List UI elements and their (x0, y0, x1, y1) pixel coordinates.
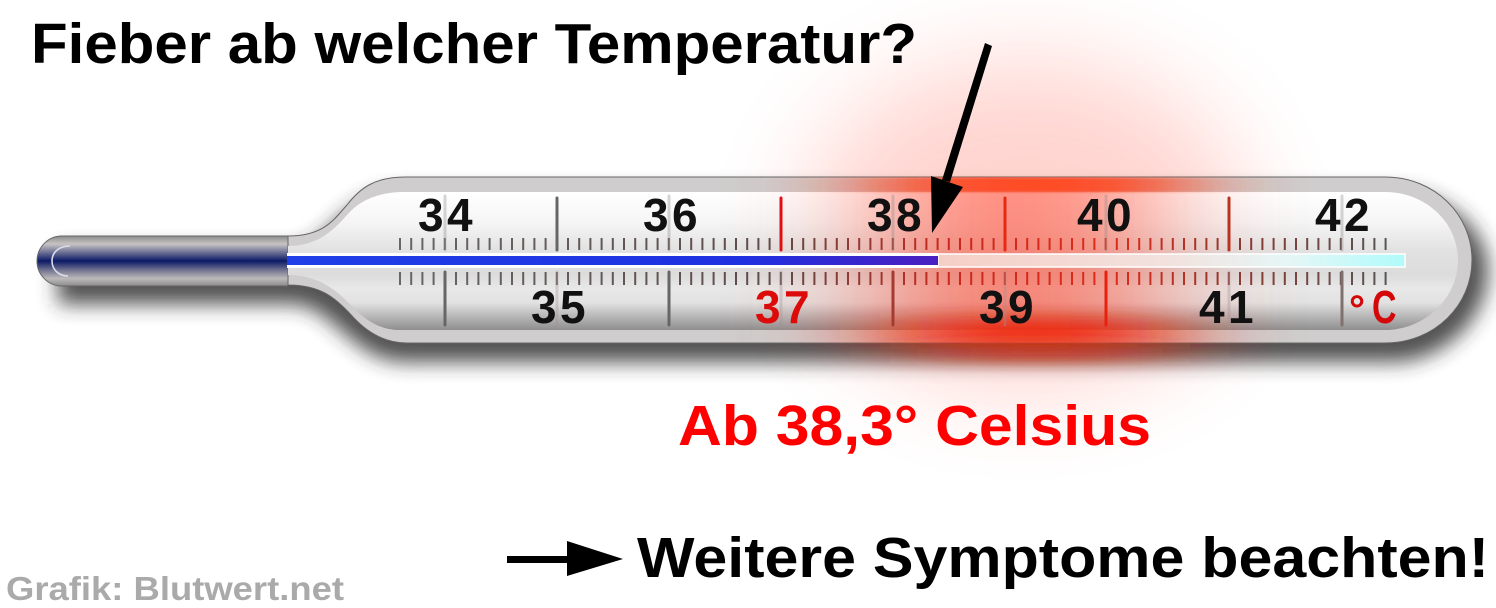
scale numbers, lower row: 41 (1199, 281, 1257, 333)
scale numbers, upper row: 42 (1315, 189, 1373, 241)
credit: Grafik: Blutwert.net (6, 570, 344, 607)
scale numbers, lower row (531, 281, 1399, 333)
scale numbers, upper row: 34 (418, 189, 476, 241)
call to action: Weitere Symptome beachten! (637, 526, 1489, 590)
scale numbers, lower row: 39 (979, 281, 1037, 333)
mercury capillary (287, 253, 1405, 268)
scale numbers, lower row: 35 (531, 281, 589, 333)
scale numbers, lower row: C (1372, 281, 1399, 333)
red glow halo (805, 60, 1245, 390)
scale numbers, lower row: ° (1349, 288, 1368, 332)
threshold label: Ab 38,3° Celsius (678, 394, 1151, 458)
major tick marks (445, 196, 1342, 325)
red glow over thermometer (880, 170, 1170, 359)
title: Fieber ab welcher Temperatur? (31, 12, 917, 76)
scale numbers, upper row: 40 (1077, 189, 1135, 241)
scale numbers, upper row: 36 (643, 189, 701, 241)
body shadow (58, 192, 1488, 362)
thermometer glass body (288, 177, 1472, 343)
arrow: pointing at 38.3 degrees (931, 43, 992, 233)
scale numbers, upper row: 38 (867, 189, 925, 241)
thermometer stem (37, 236, 288, 286)
minor tick marks (399, 244, 1390, 278)
scale numbers, upper row (418, 189, 1373, 241)
arrow: next step (507, 541, 623, 576)
scale numbers, lower row: 37 (755, 281, 813, 333)
